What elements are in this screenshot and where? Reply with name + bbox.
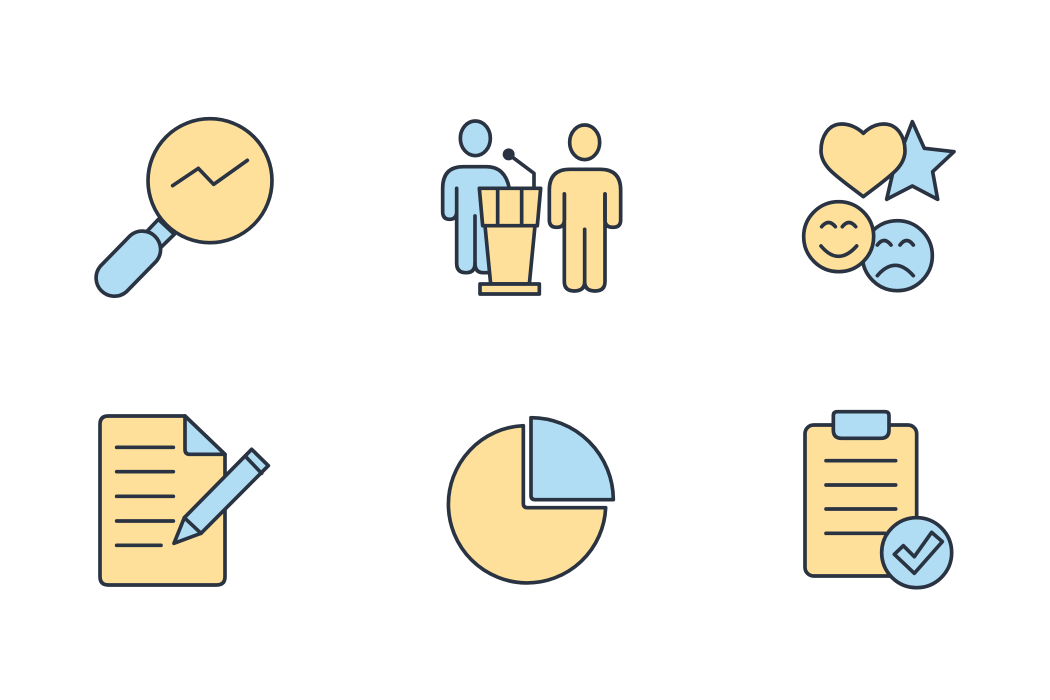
magnifier handle [96, 231, 161, 296]
right person limb dividers [564, 194, 605, 282]
microphone stand [509, 154, 534, 188]
right person body [549, 169, 621, 291]
pie quarter slice [531, 418, 613, 500]
icon: two people and a podium [443, 121, 621, 294]
magnifier neck [147, 219, 174, 248]
icon: clipboard with check mark [805, 412, 952, 588]
sad face features [877, 240, 913, 276]
icon: magnifying glass with trend line [96, 119, 272, 296]
left person head [460, 121, 490, 156]
podium column [485, 226, 535, 284]
document sheet [100, 416, 225, 585]
pie large slice [448, 426, 606, 583]
document text lines [117, 447, 173, 545]
sad face [862, 221, 932, 291]
right person head [570, 125, 600, 160]
left person leg divider [469, 216, 480, 263]
left person body [443, 167, 509, 273]
icon: document with pencil [100, 416, 268, 585]
pencil [174, 449, 268, 543]
happy face [804, 202, 874, 272]
pencil band and tip lines [184, 457, 262, 533]
folded corner [185, 416, 225, 454]
icon: heart, star and mood faces [804, 122, 954, 291]
podium base [480, 284, 539, 294]
clipboard clip [833, 412, 889, 438]
clipboard text lines [826, 461, 896, 533]
icon: pie chart [448, 418, 613, 583]
star [887, 122, 954, 199]
magnifier lens [148, 119, 272, 243]
podium top [479, 188, 541, 226]
podium top dividers [498, 188, 522, 226]
clipboard board [805, 425, 917, 576]
microphone head [503, 148, 515, 160]
trend line [173, 160, 247, 186]
heart [821, 124, 905, 197]
check mark [894, 532, 942, 573]
happy face features [821, 222, 857, 256]
check badge [882, 518, 952, 588]
